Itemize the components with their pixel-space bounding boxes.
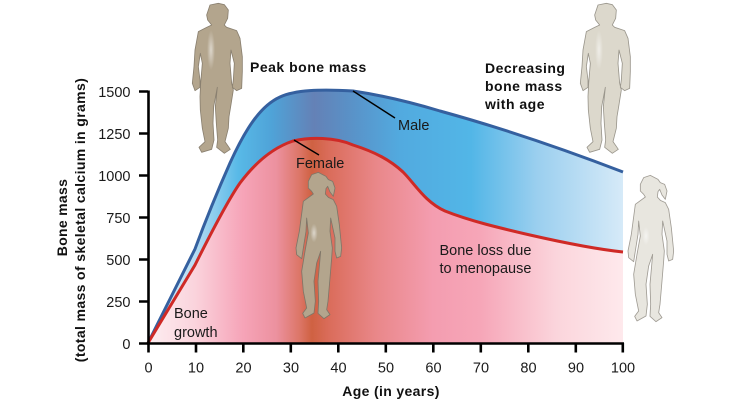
- heading: decreasing bone mass with age: with age: [484, 96, 545, 112]
- y axis title: (total mass of skeletal calcium in grams): [72, 78, 88, 362]
- label: female with leader line: [294, 140, 344, 172]
- x axis tick labels: 30: [283, 360, 299, 376]
- y axis tick labels: 1000: [98, 169, 130, 185]
- x axis tick labels: 0: [144, 360, 153, 376]
- label: bone growth: growth: [174, 325, 218, 341]
- male bone mass curve: [148, 90, 623, 343]
- x axis tick labels: 20: [235, 360, 252, 376]
- female area fill: [148, 138, 623, 343]
- x axis tick labels: 80: [520, 360, 537, 376]
- figure: older male: [580, 3, 630, 153]
- y axis tick labels: 500: [106, 253, 130, 269]
- x axis with ticks: [147, 343, 624, 352]
- y axis tick labels: 1500: [98, 85, 130, 101]
- x axis tick labels: 70: [473, 360, 489, 376]
- female bone mass curve: [148, 138, 623, 343]
- y axis tick labels: 750: [106, 211, 130, 227]
- y axis title: [54, 78, 88, 362]
- label: bone growth: [174, 306, 218, 341]
- x axis tick labels: 10: [188, 360, 204, 376]
- figure: adult female at peak: [296, 172, 342, 319]
- heading: decreasing bone mass with age: [484, 60, 565, 112]
- x axis tick labels: 60: [425, 360, 442, 376]
- label: bone loss due to menopause: to menopause: [440, 261, 531, 277]
- figure: adult male at peak: [192, 3, 242, 153]
- heading: peak bone mass: Peak bone mass: [250, 59, 367, 75]
- x axis tick labels: 100: [611, 360, 635, 376]
- x axis title: Age (in years): [342, 383, 440, 399]
- x axis tick labels: 40: [330, 360, 347, 376]
- label: bone loss due to menopause: [440, 243, 531, 277]
- label: bone loss due to menopause: Bone loss due: [440, 243, 531, 259]
- figure: older female: [628, 175, 674, 322]
- y axis tick labels: 1250: [98, 127, 130, 143]
- y axis tick labels: [98, 85, 130, 353]
- male area fill: [148, 90, 623, 343]
- label: bone growth: Bone: [174, 306, 208, 322]
- y axis tick labels: 0: [122, 337, 130, 353]
- x axis tick labels: 50: [378, 360, 394, 376]
- y axis title: Bone mass: [54, 179, 70, 256]
- x axis tick labels: 90: [568, 360, 584, 376]
- label: male with leader line: [353, 91, 429, 134]
- x axis tick labels: [144, 360, 635, 376]
- label: male with leader line: Male: [398, 118, 429, 134]
- y axis with ticks: [139, 90, 148, 352]
- y axis tick labels: 250: [106, 295, 130, 311]
- label: female with leader line: Female: [296, 156, 344, 172]
- heading: decreasing bone mass with age: bone mass: [485, 78, 563, 94]
- heading: decreasing bone mass with age: Decreasing: [485, 60, 565, 76]
